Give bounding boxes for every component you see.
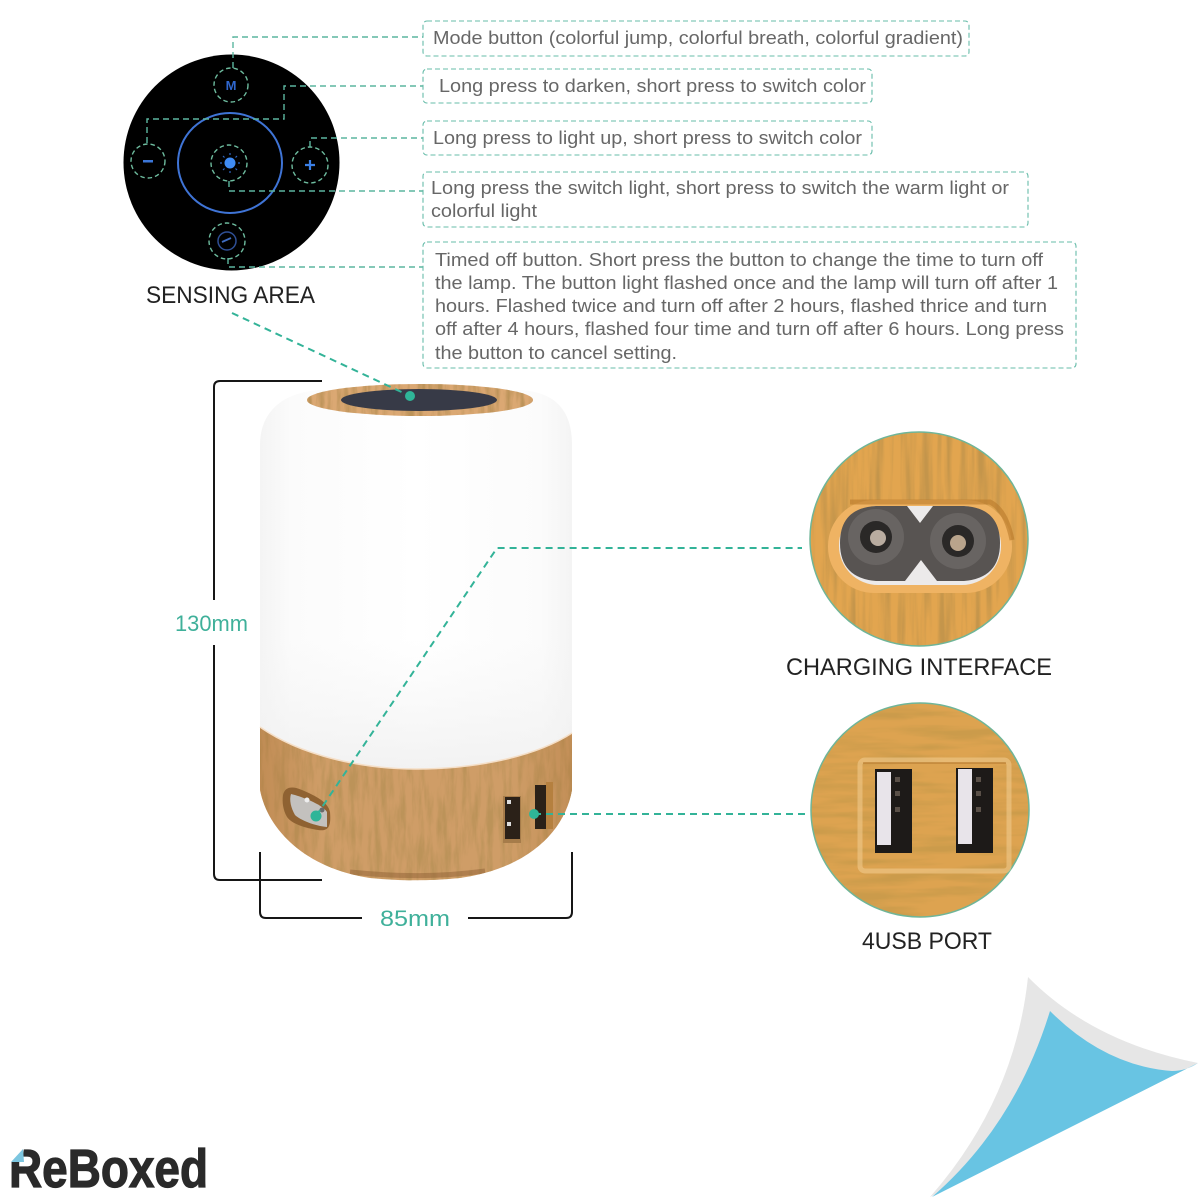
page curl blue corner (932, 1011, 1198, 1197)
right contact pin (930, 513, 986, 569)
callout: timed off button: off after 4 hours, flashed four time and turn off after 6 hours. Long press (435, 318, 1064, 339)
icon: mode button: M (226, 78, 236, 93)
arrow: sensing area to lamp top (232, 313, 415, 401)
left contact pin (848, 509, 904, 565)
label: 4USB port: 4USB PORT (862, 928, 992, 955)
decorative page curl (930, 977, 1198, 1197)
callout: timed off button: the lamp. The button light flashed once and the lamp will turn off after 1 (435, 272, 1058, 293)
panel: charging interface detail (805, 428, 1033, 650)
icon: mode button (214, 68, 248, 102)
callout: light up button: Long press to light up, short press to switch color (433, 127, 862, 148)
icon: plus button (292, 147, 328, 183)
callout: timed off button (423, 242, 1076, 368)
label: charging interface: CHARGING INTERFACE (786, 654, 1052, 681)
arrow: charging socket to detail (310, 548, 802, 822)
dimension: height 130mm (175, 381, 322, 880)
black touch panel disc (124, 54, 340, 270)
port recess (860, 760, 1009, 871)
lamp charging socket (283, 787, 330, 830)
wood disc (805, 428, 1033, 650)
leader line: minus button (147, 86, 423, 143)
callout: timed off button: Timed off button. Short press the button to change the time to turn off (435, 249, 1044, 270)
blue ring (178, 113, 282, 213)
lamp white shade (260, 390, 572, 775)
leader line: switch button (229, 181, 423, 191)
socket cavity (839, 506, 1001, 585)
dimension: height 130mm: 130mm (175, 611, 248, 636)
leader line: mode button (233, 37, 423, 68)
icon: minus button (131, 144, 165, 178)
lamp USB slots (503, 782, 553, 843)
dimension: width 85mm: 85mm (380, 906, 450, 931)
left USB socket (875, 769, 912, 853)
disc outline (811, 703, 1029, 917)
wood disc (812, 704, 1028, 916)
callout: switch light button: Long press the switch light, short press to switch the warm light or (431, 177, 1009, 198)
light seam above base (260, 727, 572, 769)
dimension: width 85mm (260, 852, 572, 931)
callout: switch light button: colorful light (431, 200, 537, 221)
callout: mode button (423, 21, 969, 56)
right USB socket (956, 768, 993, 853)
panel: sensing area control diagram (124, 54, 340, 270)
heading: sensing area: SENSING AREA (146, 282, 315, 309)
leader line: plus button (310, 138, 423, 147)
callout: light up button (423, 121, 872, 155)
arrow: USB slots to detail (529, 809, 806, 819)
icon: timer button (209, 223, 245, 259)
lamp wooden base (260, 728, 572, 880)
page curl grey fold (930, 977, 1198, 1197)
logo blue corner (8, 1145, 26, 1162)
lamp illustration (255, 384, 577, 885)
socket dark insert (840, 506, 1000, 581)
socket recess (828, 500, 1012, 593)
logo: ReBoxed: ReBoxed (9, 1139, 208, 1199)
disc outline (810, 432, 1028, 646)
lamp dark sensing panel (341, 389, 497, 411)
callout: darken button: Long press to darken, short press to switch color (439, 75, 866, 96)
callout: switch light button (423, 172, 1028, 227)
callout: timed off button: hours. Flashed twice and turn off after 2 hours, flashed thrice and turn (435, 295, 1047, 316)
callout: darken button (423, 69, 872, 103)
leader line: timer button (228, 258, 423, 267)
panel: USB port detail (805, 698, 1035, 922)
lamp wooden top ring (307, 384, 533, 417)
icon: light switch button (211, 145, 247, 181)
callout: timed off button: the button to cancel setting. (435, 342, 677, 363)
callout: mode button: Mode button (colorful jump, colorful breath, colorful gradient) (433, 27, 963, 48)
